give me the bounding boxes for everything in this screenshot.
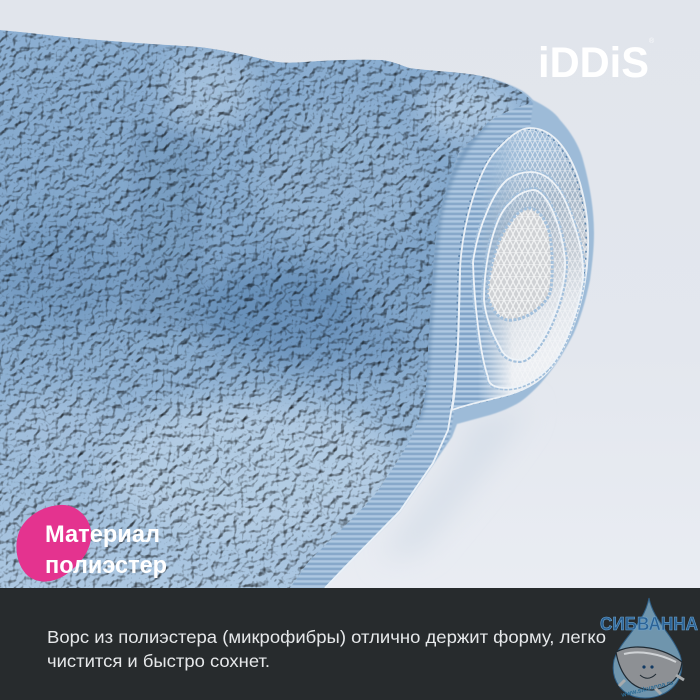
rolled end: outer silhouette [280,76,594,588]
footer band [0,588,700,700]
watermark: Sibvanna [600,598,698,699]
rolled end: second layer [473,172,583,388]
footer description: чистится и быстро сохнет. [47,651,270,671]
footer description: Ворс из полиэстера (микрофибры) отлично держит форму, легко [47,627,606,647]
rug edge shade [418,123,487,420]
badge: heading: полиэстер [45,552,167,579]
rug pile surface [0,0,540,590]
rolled end: core with white grid backing [487,208,552,320]
badge: pink blob [16,505,91,582]
logo: IDDIS: iDDiS [538,39,649,87]
badge: material [16,505,167,582]
rug binding stitch [325,270,460,588]
watermark: bathtub character [616,647,684,694]
rolled end: outer layer [450,128,588,411]
watermark: water drop [613,598,682,698]
badge: heading: Материал [45,521,160,548]
watermark: brand name: СИБВАННА [600,614,698,634]
rolled end: binding of pile edge [290,103,533,588]
shadow under rug [380,405,530,560]
watermark: url: www.sibvanna.ru [620,679,674,699]
rolled end: third layer [484,190,565,360]
logo: registered mark: ® [649,37,655,45]
photo: rolled bath mat [0,0,594,590]
